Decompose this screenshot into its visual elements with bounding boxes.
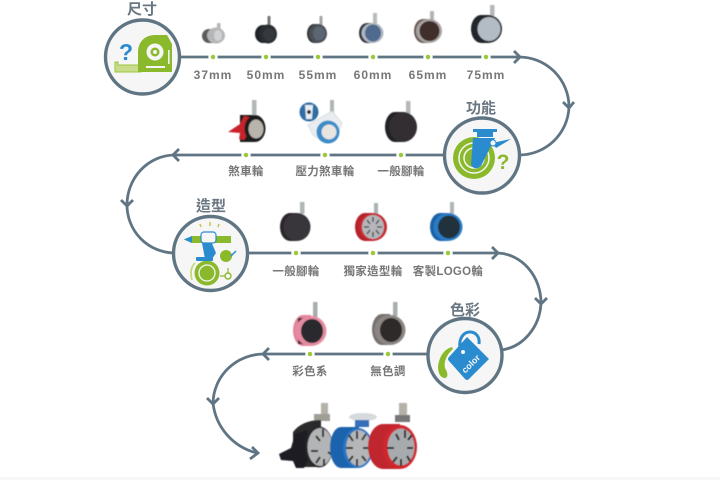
- wheel: standard caster: [385, 101, 417, 142]
- section: size: [106, 1, 180, 94]
- label: brake caster: 煞車輪: [228, 164, 264, 178]
- arrow: curve to final product group: [213, 403, 258, 459]
- dots on function row: [242, 152, 404, 158]
- styling row wheels and labels: [272, 202, 483, 278]
- arrow: curve out of function circle: [520, 107, 569, 155]
- label 50mm: 50mm: [247, 68, 285, 82]
- caster: black brake: [279, 403, 333, 468]
- heading: styling: 造型: [196, 198, 226, 215]
- caster: red: [368, 403, 417, 469]
- arrow: curve into styling circle: [127, 205, 174, 253]
- arrow: curve from styling to colour: [498, 253, 547, 304]
- colour row wheels and labels: [292, 302, 406, 378]
- size row wheels and labels: [194, 5, 505, 82]
- wheel: neutral colour caster: [372, 302, 406, 345]
- label: neutral colours: 無色調: [370, 364, 406, 378]
- wheel: colour series caster: [293, 302, 326, 346]
- arrow: curve from size to function: [518, 57, 574, 108]
- section: colour: [428, 301, 502, 392]
- label: standard caster: 一般腳輪: [377, 164, 425, 178]
- wheel: standard caster: [280, 202, 310, 241]
- wheel 60mm: [359, 13, 384, 43]
- label: colour series: 彩色系: [292, 364, 328, 378]
- wheel: custom logo caster: [430, 202, 462, 241]
- wheel 50mm: [255, 16, 277, 44]
- arrow: curve out of colour circle: [501, 303, 541, 350]
- section: function: [444, 100, 520, 193]
- icon: hand with pencil and wheels: [174, 216, 248, 290]
- label 65mm: 65mm: [409, 68, 447, 82]
- icon: paint bucket: color: [460, 352, 483, 375]
- dots on styling row: [292, 250, 452, 256]
- icon: tape measure: ?: [119, 39, 133, 65]
- wheel 55mm: [307, 16, 327, 43]
- label: custom logo caster: 客製LOGO輪: [413, 264, 483, 278]
- arrow: function row path: [173, 149, 444, 161]
- heading: function: 功能: [466, 100, 496, 117]
- section: styling: [174, 198, 248, 290]
- label 75mm: 75mm: [467, 68, 505, 82]
- heading: size: 尺寸: [127, 1, 157, 18]
- label 37mm: 37mm: [194, 68, 232, 82]
- label: standard caster: 一般腳輪: [272, 264, 320, 278]
- heading: colour: 色彩: [450, 301, 480, 319]
- icon: caster with question mark: ?: [497, 151, 509, 174]
- wheel 37mm: [202, 23, 225, 44]
- wheel: exclusive design caster: [355, 203, 387, 241]
- wheel: pressure brake caster: [300, 100, 342, 144]
- arrow: styling row path: [248, 247, 498, 259]
- label: exclusive design caster: 獨家造型輪: [344, 264, 403, 278]
- wheel 75mm: [471, 5, 502, 43]
- label 60mm: 60mm: [354, 68, 392, 82]
- wheel 65mm: [414, 11, 442, 43]
- arrow: curve from function to styling: [121, 155, 174, 206]
- function row wheels and labels: [228, 100, 425, 178]
- label: pressure brake caster: 壓力煞車輪: [296, 164, 355, 178]
- caster: blue with plate: [330, 413, 377, 468]
- product group: three large casters: [279, 403, 417, 469]
- arrow: colour row path: [263, 348, 428, 360]
- arrow: size row path: [180, 51, 520, 63]
- arrow: curve from colour to product: [207, 354, 264, 404]
- label 55mm: 55mm: [299, 68, 337, 82]
- dots on size row: [210, 54, 490, 60]
- wheel: brake caster: [228, 100, 266, 142]
- dots on colour row: [306, 350, 392, 358]
